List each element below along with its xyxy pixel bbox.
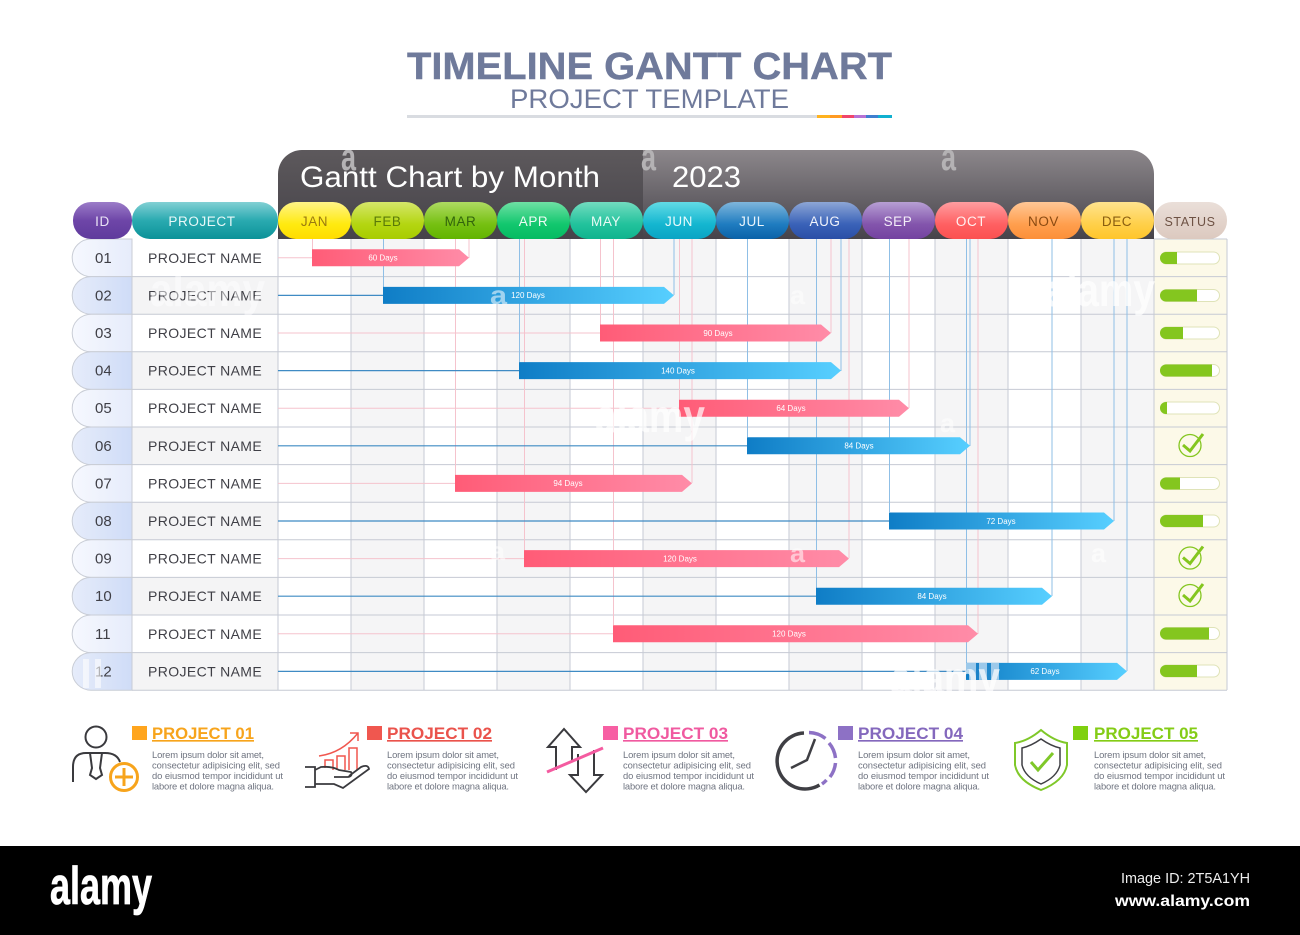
status: progress 07 bbox=[1160, 478, 1220, 490]
bar: project 06: 84 Days bbox=[844, 442, 874, 450]
description: Lorem ipsum dolor sit amet, bbox=[623, 749, 735, 760]
description: labore et dolore magna aliqua. bbox=[623, 780, 745, 792]
watermark overlay: alamy bbox=[1045, 264, 1155, 316]
description: labore et dolore magna aliqua. bbox=[152, 780, 274, 792]
watermark overlay: alamy bbox=[595, 390, 705, 442]
status: progress 04 bbox=[1160, 364, 1220, 376]
swatch bbox=[603, 726, 618, 740]
legend: project 02 bbox=[305, 725, 518, 792]
description: labore et dolore magna aliqua. bbox=[858, 780, 980, 792]
watermark overlay: alamy bbox=[150, 264, 265, 316]
status column bbox=[1160, 252, 1220, 677]
pill: aug: AUG bbox=[809, 214, 841, 229]
bar: project 04 bbox=[519, 362, 841, 379]
description: do eiusmod tempor incididunt ut bbox=[387, 770, 518, 781]
header row pills bbox=[73, 202, 1227, 239]
pill: aug bbox=[789, 202, 862, 239]
description: consectetur adipisicing elit, sed bbox=[858, 760, 986, 770]
row ids: 04 bbox=[95, 362, 112, 380]
project names: PROJECT NAME bbox=[148, 400, 262, 416]
project names: PROJECT NAME bbox=[148, 250, 262, 266]
description bbox=[152, 749, 283, 792]
bar: project 05: 64 Days bbox=[776, 404, 806, 413]
legend: project 04 bbox=[777, 725, 989, 792]
bar: project 07: 94 Days bbox=[553, 479, 583, 488]
bar: project 05 bbox=[679, 400, 909, 417]
pill: jun: JUN bbox=[665, 214, 693, 229]
bar: project 11: 120 Days bbox=[772, 630, 806, 638]
project names: PROJECT NAME bbox=[148, 550, 262, 566]
status: progress 12 bbox=[1160, 665, 1220, 677]
project names: PROJECT NAME bbox=[148, 288, 262, 304]
pill: dec bbox=[1081, 202, 1154, 239]
pill: may: MAY bbox=[591, 214, 621, 229]
icon: shield with check bbox=[1015, 730, 1067, 790]
pill: jan bbox=[278, 202, 351, 239]
heading: timeline gantt chart: TIMELINE GANTT CHART bbox=[407, 46, 892, 88]
icon: hand with chart bbox=[305, 733, 369, 788]
bar: project 08: 72 Days bbox=[986, 517, 1016, 526]
watermark overlay: a bbox=[940, 408, 956, 438]
pill: oct bbox=[935, 202, 1008, 239]
id column cells bbox=[72, 239, 132, 690]
footer bar bbox=[0, 846, 1300, 935]
description: Lorem ipsum dolor sit amet, bbox=[152, 749, 264, 760]
grid lines bbox=[132, 239, 1227, 690]
pill: may bbox=[570, 202, 643, 239]
heading: PROJECT 03 bbox=[623, 725, 728, 743]
row ids: 01 bbox=[95, 250, 112, 267]
status: complete 09 bbox=[1179, 546, 1203, 569]
description: do eiusmod tempor incididunt ut bbox=[623, 770, 754, 781]
watermark overlay: a bbox=[790, 280, 806, 310]
connector lines: blue projects bbox=[384, 239, 1127, 671]
status: progress 11 bbox=[1160, 628, 1220, 640]
panel: chart header band: a bbox=[341, 137, 357, 179]
project names: PROJECT NAME bbox=[148, 476, 262, 492]
row ids: 12 bbox=[95, 664, 112, 680]
pill: feb bbox=[351, 202, 424, 239]
project names bbox=[148, 250, 262, 680]
description bbox=[387, 749, 518, 792]
row ids: 08 bbox=[95, 513, 112, 530]
gantt bars bbox=[312, 249, 1127, 680]
table background bbox=[132, 239, 1227, 690]
pill: status bbox=[1154, 202, 1227, 239]
bar: project 07 bbox=[455, 475, 692, 492]
bar: project 09: 120 Days bbox=[663, 554, 697, 564]
pill: apr: APR bbox=[519, 214, 548, 229]
row ids: 05 bbox=[95, 400, 112, 417]
pill: sep: SEP bbox=[884, 214, 912, 229]
pill: nov: NOV bbox=[1028, 214, 1059, 229]
panel: chart header band: a bbox=[941, 137, 957, 179]
watermark overlay bbox=[80, 264, 1155, 704]
pill: jun bbox=[643, 202, 716, 239]
watermark overlay: ll bbox=[80, 653, 104, 697]
status: progress 03 bbox=[1160, 327, 1220, 339]
project names: PROJECT NAME bbox=[148, 664, 262, 680]
icon: clock bbox=[777, 732, 836, 789]
watermark overlay: alamy bbox=[890, 652, 1000, 704]
description: do eiusmod tempor incididunt ut bbox=[152, 770, 283, 781]
row ids: 07 bbox=[95, 476, 112, 492]
icon: person with plus bbox=[73, 726, 138, 790]
status: complete 06 bbox=[1179, 434, 1203, 456]
pill: id bbox=[73, 202, 132, 239]
pill: feb: FEB bbox=[373, 214, 402, 229]
heading: PROJECT 05 bbox=[1094, 725, 1198, 743]
status: progress 05 bbox=[1160, 402, 1220, 414]
bar: project 12 bbox=[966, 663, 1127, 680]
swatch bbox=[132, 726, 147, 740]
pill: jan: JAN bbox=[301, 214, 328, 229]
project names: PROJECT NAME bbox=[148, 362, 262, 378]
swatch bbox=[367, 726, 382, 740]
description: consectetur adipisicing elit, sed bbox=[1094, 760, 1222, 770]
legend: project 03 bbox=[547, 725, 754, 792]
project names: PROJECT NAME bbox=[148, 438, 262, 454]
bar: project 09 bbox=[524, 550, 849, 567]
bar: project 04: 140 Days bbox=[661, 366, 695, 376]
panel: chart header band bbox=[278, 150, 1154, 239]
row ids: 03 bbox=[95, 325, 112, 342]
title underline bbox=[407, 115, 892, 118]
row ids bbox=[95, 250, 112, 680]
title bbox=[407, 46, 892, 118]
description: consectetur adipisicing elit, sed bbox=[387, 760, 515, 770]
description bbox=[1094, 749, 1225, 792]
project names: PROJECT NAME bbox=[148, 325, 262, 341]
pill: mar: MAR bbox=[445, 214, 476, 229]
description bbox=[623, 749, 754, 792]
bar: project 01 bbox=[312, 249, 469, 266]
pill: project bbox=[132, 202, 278, 239]
pill: dec: DEC bbox=[1102, 214, 1132, 229]
pill: mar bbox=[424, 202, 497, 239]
project names: PROJECT NAME bbox=[148, 626, 262, 642]
bar: project 08 bbox=[889, 512, 1114, 530]
project names: PROJECT NAME bbox=[148, 588, 262, 604]
status: progress 08 bbox=[1160, 515, 1220, 527]
pill: oct: OCT bbox=[956, 214, 986, 229]
connector lines: pink projects bbox=[278, 239, 978, 634]
description: labore et dolore magna aliqua. bbox=[387, 780, 509, 792]
watermark overlay: a bbox=[790, 538, 806, 568]
pill: nov bbox=[1008, 202, 1081, 239]
legend: project 01 bbox=[73, 725, 283, 792]
bar: project 02: 120 Days bbox=[511, 291, 545, 300]
bar: project 11 bbox=[613, 625, 978, 642]
row ids: 11 bbox=[95, 626, 111, 643]
description: Lorem ipsum dolor sit amet, bbox=[858, 749, 970, 760]
row ids: 06 bbox=[95, 438, 112, 455]
heading: PROJECT 04 bbox=[858, 725, 964, 743]
bar: project 10 bbox=[816, 588, 1052, 605]
legend: project 05 bbox=[1015, 725, 1225, 792]
watermark overlay: a bbox=[490, 280, 508, 310]
image id: Image ID: 2T5A1YH bbox=[1121, 870, 1250, 887]
description: labore et dolore magna aliqua. bbox=[1094, 780, 1216, 792]
website: www.alamy.com bbox=[1114, 893, 1250, 910]
pill: sep bbox=[862, 202, 935, 239]
description: Lorem ipsum dolor sit amet, bbox=[1094, 749, 1206, 760]
pill: jul: JUL bbox=[739, 214, 765, 229]
swatch bbox=[838, 726, 853, 740]
description: do eiusmod tempor incididunt ut bbox=[1094, 770, 1225, 781]
status: complete 10 bbox=[1179, 584, 1203, 606]
description: Lorem ipsum dolor sit amet, bbox=[387, 749, 499, 760]
heading: PROJECT 02 bbox=[387, 725, 492, 743]
watermark overlay: a bbox=[1091, 538, 1107, 568]
bar: project 03: 90 Days bbox=[703, 329, 733, 338]
pill: apr bbox=[497, 202, 570, 239]
project names: PROJECT NAME bbox=[148, 513, 262, 529]
header title: Gantt Chart by Month bbox=[300, 161, 600, 194]
horizontal leaders: blue projects bbox=[278, 295, 966, 671]
description bbox=[858, 749, 989, 792]
icon: up and down arrows bbox=[547, 729, 603, 792]
bar: project 06 bbox=[747, 437, 970, 454]
bar: project 03 bbox=[600, 324, 831, 342]
description: consectetur adipisicing elit, sed bbox=[623, 760, 751, 770]
status: progress 01 bbox=[1160, 252, 1220, 264]
description: do eiusmod tempor incididunt ut bbox=[858, 770, 989, 781]
row ids: 02 bbox=[95, 288, 112, 304]
panel: chart header band: a bbox=[641, 137, 657, 179]
pill: status: STATUS bbox=[1164, 215, 1216, 229]
bar: project 10: 84 Days bbox=[917, 592, 947, 601]
pill: jul bbox=[716, 202, 789, 239]
description: consectetur adipisicing elit, sed bbox=[152, 760, 280, 770]
row ids: 10 bbox=[95, 588, 112, 605]
bar: project 02 bbox=[383, 287, 674, 304]
legend bbox=[73, 725, 1225, 792]
row ids: 09 bbox=[95, 550, 112, 568]
pill: project: PROJECT bbox=[168, 214, 236, 229]
watermark overlay: a bbox=[490, 536, 506, 566]
status: progress 02 bbox=[1160, 290, 1220, 302]
heading: PROJECT 01 bbox=[152, 725, 254, 743]
subheading: project template: PROJECT TEMPLATE bbox=[510, 84, 789, 114]
header year: 2023 bbox=[672, 161, 741, 194]
bar: project 12: 62 Days bbox=[1030, 667, 1060, 676]
bar: project 01: 60 Days bbox=[368, 254, 398, 262]
footer logo: alamy bbox=[50, 857, 152, 916]
swatch bbox=[1073, 726, 1088, 740]
pill: id: ID bbox=[95, 214, 110, 229]
